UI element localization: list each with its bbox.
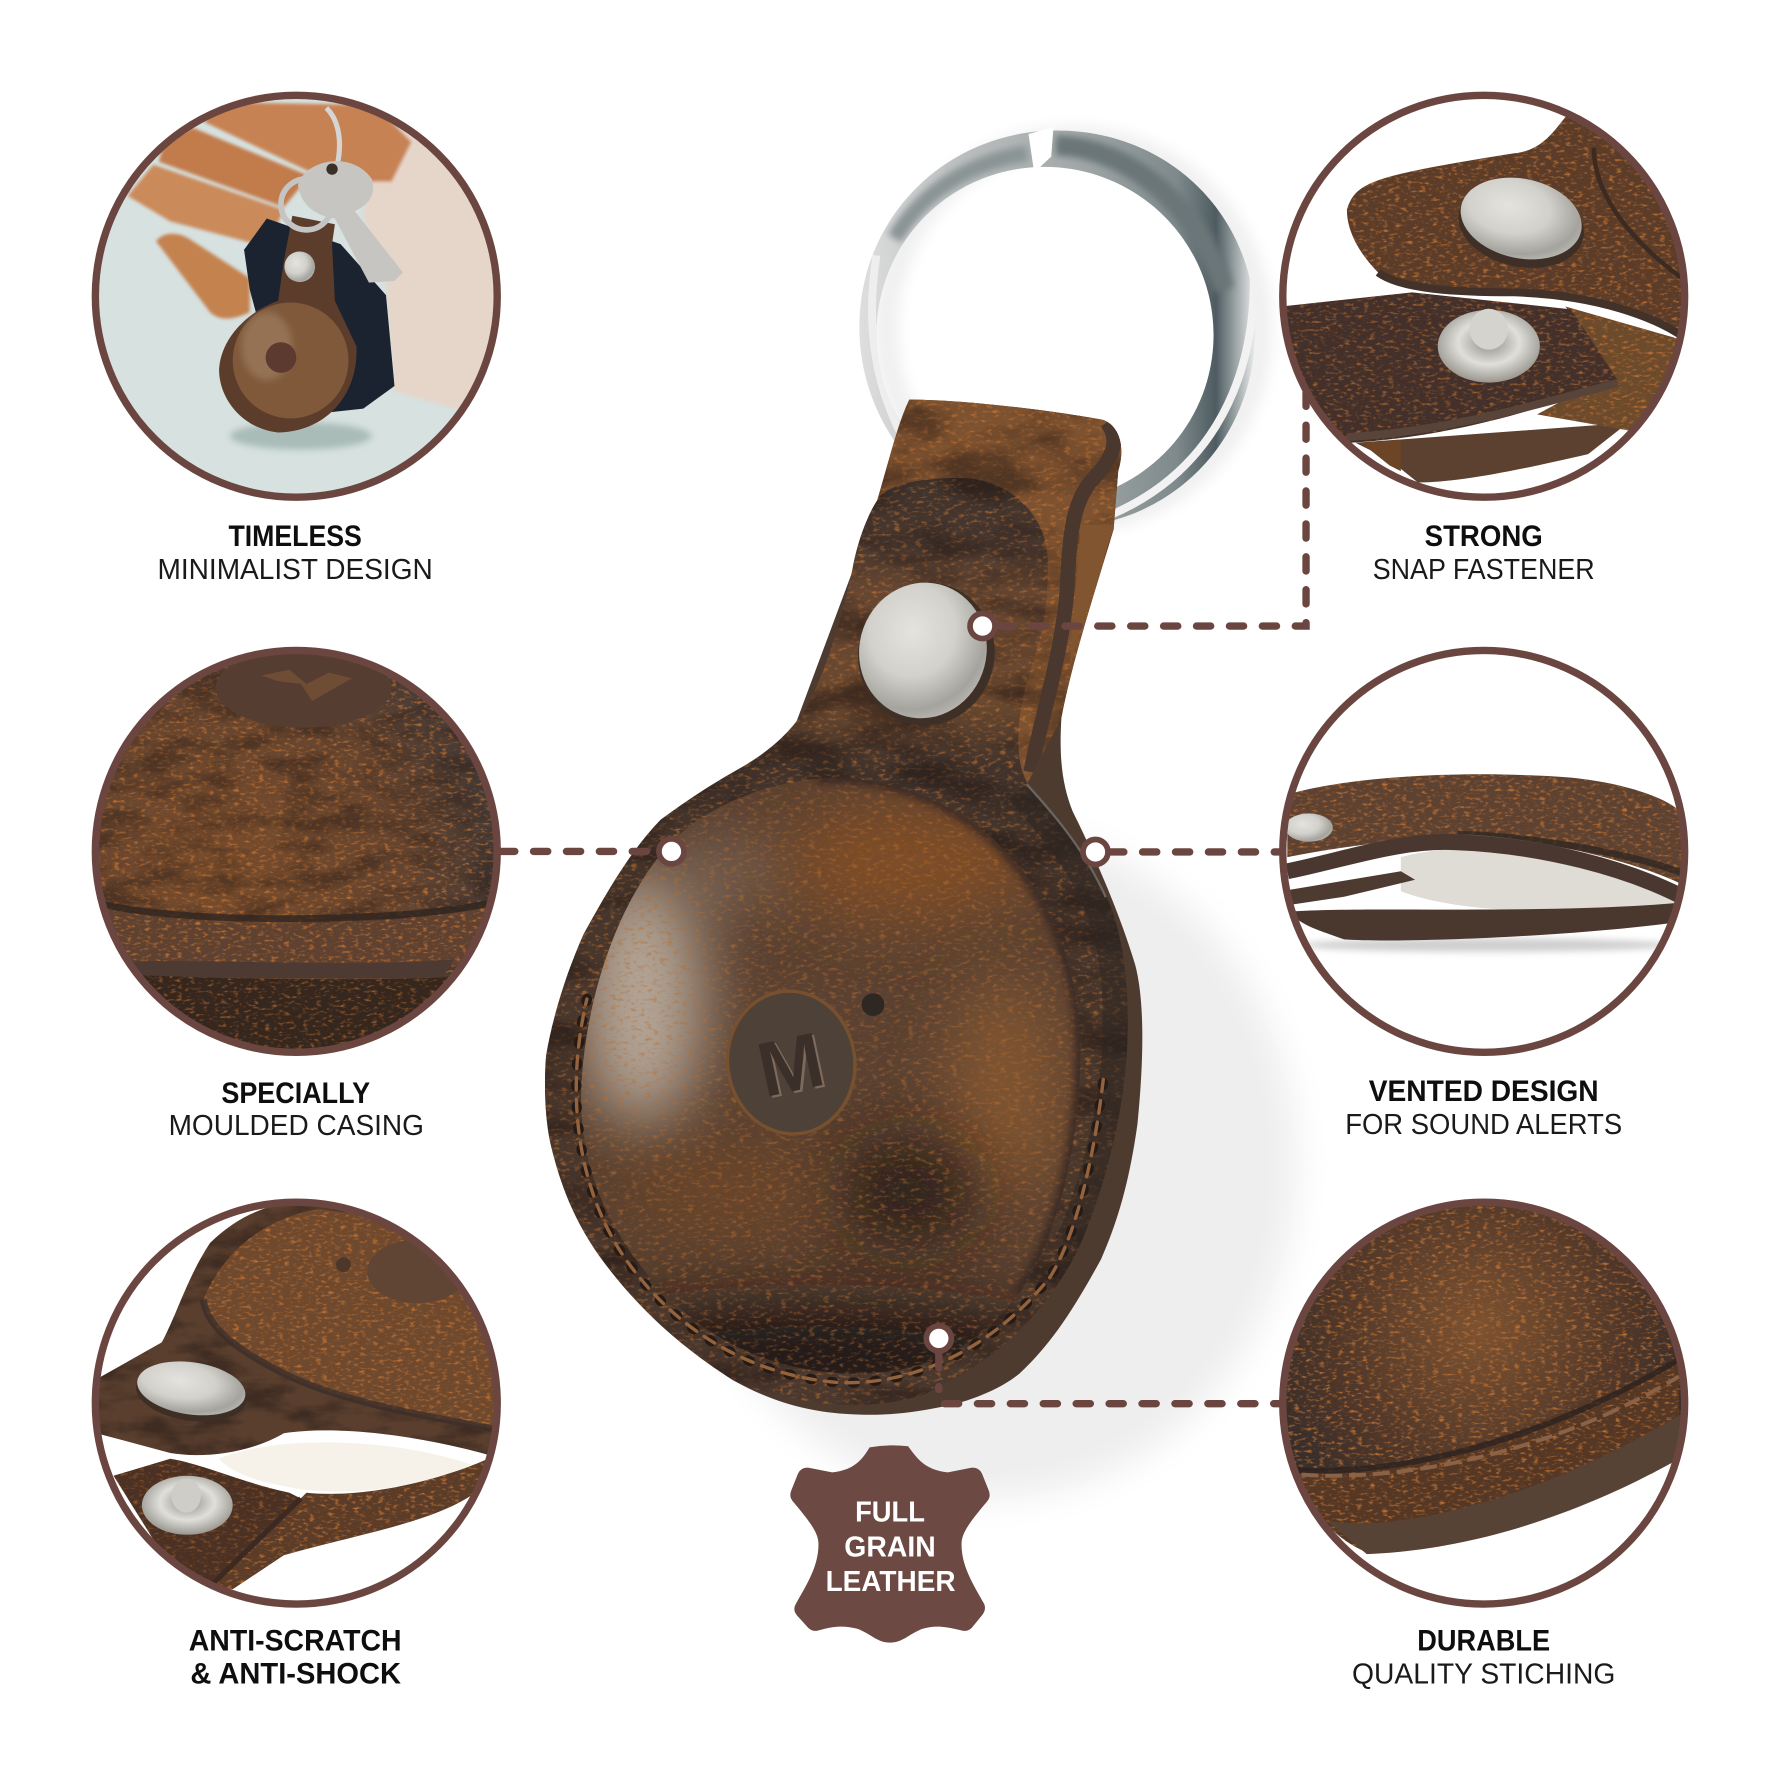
caption: durable: QUALITY STICHING [1352,1659,1615,1691]
front leather body [534,465,1158,1419]
panel: vented design [1276,647,1690,1061]
badge: full grain leather hide [790,1445,990,1643]
caption: anti-scratch: ANTI-SCRATCH [189,1625,402,1658]
snap cap [1458,205,1584,268]
caption: durable: DURABLE [1417,1625,1550,1658]
photo: leather dome close-up [91,647,499,1056]
panel: specially moulded casing [91,647,499,1056]
caption: vented design [1345,1075,1622,1141]
moulded dome [581,778,1080,1374]
key ring [859,127,1256,528]
photo: side view of case [1286,774,1681,955]
keys [281,108,403,283]
leader: vented design [1083,839,1281,864]
leader: durable stitching [926,1326,1281,1404]
caption: timeless: MINIMALIST DESIGN [158,554,433,586]
caption: durable [1352,1625,1615,1691]
debossed M logo: M [753,1018,834,1116]
photo: hand holding keys [91,91,505,499]
back layer of the case [636,400,1142,1415]
leader lines and marker dots [501,393,1306,1404]
caption: anti-scratch: & ANTI-SHOCK [190,1658,402,1691]
snap button [842,567,1011,741]
product photo: leather keychain [534,127,1296,1498]
caption: anti-scratch [189,1625,402,1691]
panel: anti-scratch and anti-shock [91,1198,502,1612]
debossed M logo: M [750,1016,831,1114]
leader: moulded casing [501,839,684,864]
strap loop [877,400,1122,784]
badge: full grain leather hide: FULL [855,1497,925,1529]
snap cap [136,1382,246,1422]
panel: timeless in-hand photo [91,91,505,499]
photo: open snap [1286,116,1681,482]
debossed M logo [718,983,884,1142]
caption: specially moulded: MOULDED CASING [169,1110,424,1142]
stud [1438,310,1540,383]
badge: full grain leather hide: LEATHER [826,1566,956,1598]
soft drop shadow [683,138,1296,1498]
caption: timeless [158,520,433,586]
mini keychain [219,216,357,433]
stud [142,1476,233,1535]
badge: full grain leather hide: GRAIN [844,1531,936,1563]
caption: vented design: VENTED DESIGN [1369,1075,1599,1108]
caption: specially moulded: SPECIALLY [221,1077,370,1110]
photo: opened case [99,1206,494,1590]
panel: durable stitching [1276,1198,1690,1612]
caption: specially moulded [169,1077,424,1142]
panel: strong snap fastener [1276,91,1690,505]
photo: stitched edge close-up [1286,1206,1681,1554]
caption: vented design: FOR SOUND ALERTS [1345,1109,1622,1141]
caption: timeless: TIMELESS [228,520,362,553]
leader: snap fastener [970,393,1306,639]
caption: strong snap: SNAP FASTENER [1373,554,1595,586]
caption: strong snap [1373,520,1595,586]
caption: strong snap: STRONG [1425,520,1543,553]
stitching [576,999,1103,1383]
